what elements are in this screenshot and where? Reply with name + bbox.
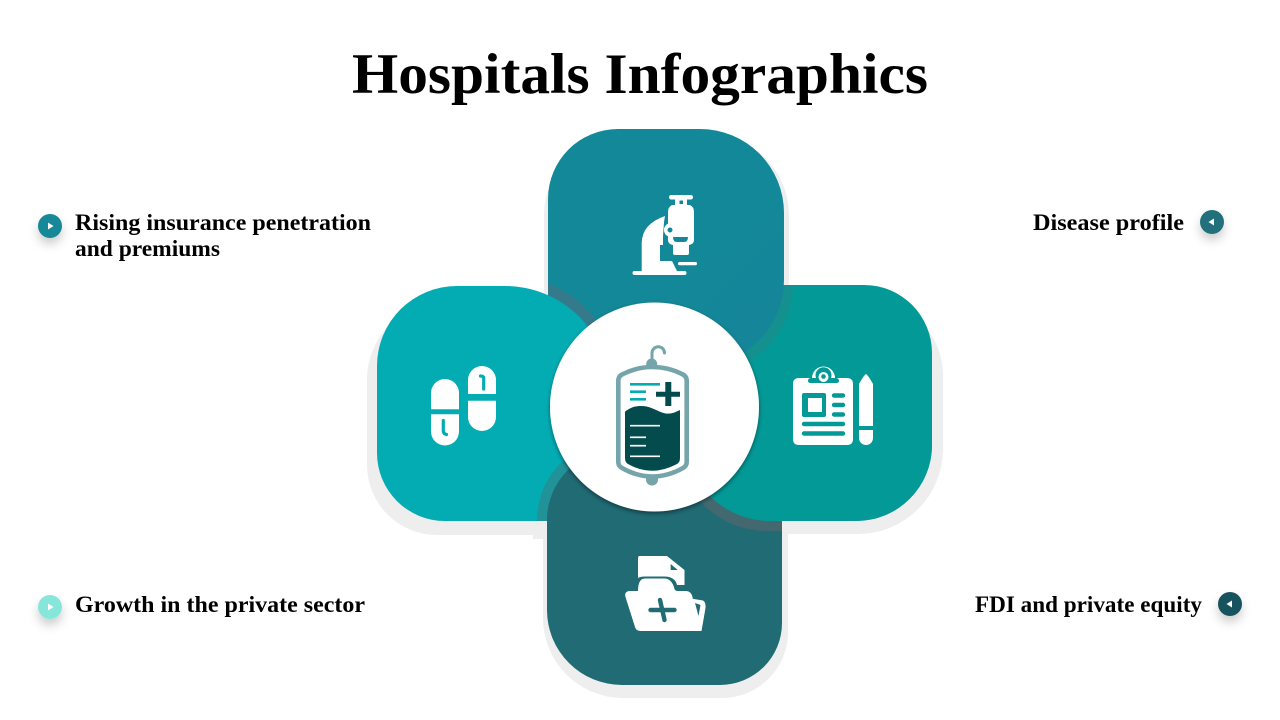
right petal shadow band [677,430,782,531]
right petal overlap [710,430,932,521]
top petal shadow band [680,285,793,374]
panel: top petal [548,129,784,365]
panel: left petal [377,286,610,521]
icon: clipboard and pencil [793,367,873,445]
center circle [550,302,759,512]
callout: disease profile: Disease profile [1033,210,1184,236]
icon: pills [431,366,496,446]
callout: rising insurance [38,210,371,262]
left petal shadow band [548,283,621,420]
callout: FDI and private equity: FDI and private equity [975,592,1202,618]
callout: rising insurance: and premiums [75,236,220,262]
panel: right petal [685,285,932,521]
icon: microscope [632,195,697,275]
icon: medical folder [625,556,706,631]
callout: rising insurance: Rising insurance penetration [75,210,371,236]
callout: private sector growth: Growth in the private sector [75,592,365,618]
bottom petal shadow band [537,440,617,521]
panel: bottom petal [547,450,782,685]
icon: IV bag [618,347,687,486]
title: Hospitals Infographics [352,43,928,106]
petal shadows [367,135,943,698]
